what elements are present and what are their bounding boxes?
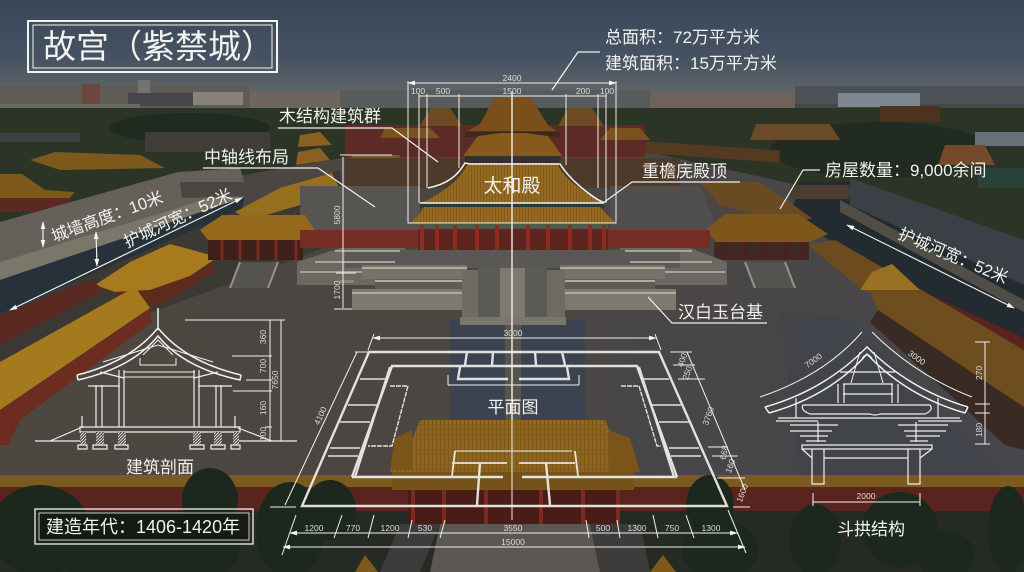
- marble terraces: [297, 248, 727, 325]
- label: double-eave roof: 重檐庑殿顶: [642, 162, 727, 181]
- plan dimension numbers: 160: [723, 457, 737, 474]
- plan walls: [302, 352, 727, 506]
- side hall buildings: [180, 182, 265, 198]
- floor plan drawing: [270, 328, 750, 555]
- plan dimensions: [270, 334, 750, 555]
- section dimensions: 160: [258, 401, 268, 415]
- rear halls: [345, 125, 645, 157]
- label: moat width left: [10, 181, 242, 310]
- vertical height dimension: 5800: [332, 205, 342, 224]
- plan dimension numbers: 500: [596, 523, 610, 533]
- hall dimension lines: 100: [600, 86, 614, 96]
- plan dimension numbers: 1300: [628, 523, 647, 533]
- right galleries: [700, 182, 812, 225]
- label: hall name: 太和殿: [483, 175, 541, 197]
- hall dimension lines: 200: [576, 86, 590, 96]
- construction years box: [35, 509, 253, 544]
- city wall and moat left: [0, 168, 245, 314]
- bracket dimensions: 3000: [906, 348, 928, 367]
- label: number of rooms: 房屋数量：9,000余间: [825, 156, 987, 181]
- green tree belt: [0, 108, 1024, 240]
- label: moat width left: 护城河宽：52米: [119, 181, 235, 253]
- area stats callout: 总面积：72万平方米: [605, 23, 760, 48]
- plan dimension numbers: 770: [346, 523, 360, 533]
- plan dimension numbers: 250: [680, 364, 694, 381]
- side plazas: [300, 186, 420, 236]
- section caption: 建筑剖面: [126, 458, 194, 477]
- front gate: [390, 420, 640, 472]
- plan dimension numbers: 1200: [381, 523, 400, 533]
- bracket dimensions: 7000: [803, 351, 824, 370]
- bracket dimensions: [760, 332, 990, 506]
- hall dimension lines: 2400: [503, 73, 522, 83]
- trees: [0, 468, 1024, 572]
- section dimensions: 360: [258, 330, 268, 344]
- plan dimension numbers: 750: [665, 523, 679, 533]
- vertical height dimension: 1700: [332, 280, 342, 299]
- right moat and wall: [790, 178, 1024, 345]
- label: moat width right: 护城河宽：52米: [895, 221, 1012, 288]
- bracket set drawing: [760, 332, 990, 539]
- section columns: [35, 370, 297, 441]
- bracket dimensions: 2000: [857, 491, 876, 501]
- label: central axis layout: [203, 148, 375, 207]
- hall forecourt steps: [230, 262, 795, 288]
- bracket roof: [765, 347, 968, 413]
- court shading: [450, 320, 585, 420]
- plan dimension numbers: 3000: [504, 328, 523, 338]
- hall dimension lines: 500: [436, 86, 450, 96]
- plan dimension numbers: 668: [718, 444, 730, 460]
- left galleries: [95, 244, 218, 292]
- title: [28, 21, 277, 72]
- plan dimension numbers: 4100: [312, 405, 329, 426]
- plan dimension numbers: [305, 328, 750, 547]
- side halls: [200, 215, 316, 240]
- plan dimension numbers: 15000: [501, 537, 525, 547]
- section dimensions: [185, 320, 285, 441]
- title: 故宫（紫禁城）: [43, 28, 274, 65]
- label: marble base: [648, 297, 767, 323]
- label: marble base: 汉白玉台基: [678, 303, 763, 322]
- section dimensions: 7650: [270, 370, 280, 389]
- area stats callout: [552, 23, 777, 90]
- plan dimension numbers: 400: [675, 351, 689, 368]
- label: number of rooms: [780, 156, 987, 209]
- section drawing: [35, 308, 297, 477]
- bracket caption: 斗拱结构: [837, 520, 905, 539]
- label: double-eave roof: [603, 162, 740, 203]
- plan dimension numbers: 1200: [305, 523, 324, 533]
- hall dimension lines: [408, 73, 616, 420]
- bracket dimensions: 180: [974, 423, 984, 437]
- bracket beams: [776, 372, 962, 484]
- label: wood structure: 木结构建筑群: [279, 107, 381, 126]
- section footings: [78, 432, 240, 449]
- plan dimension numbers: 3550: [504, 523, 523, 533]
- section dimensions: 100: [258, 427, 268, 441]
- plan dimension numbers: 1300: [702, 523, 721, 533]
- distant skyline: [0, 80, 1024, 116]
- plan dimension numbers: 3760: [700, 405, 716, 427]
- label: central axis layout: 中轴线布局: [204, 148, 289, 167]
- hall dimension lines: 100: [411, 86, 425, 96]
- label: city wall height: 城墙高度：10米: [48, 184, 166, 247]
- construction years box: 建造年代：1406-1420年: [46, 513, 240, 539]
- hall of supreme harmony: [410, 163, 616, 250]
- label: moat width right: [847, 221, 1014, 308]
- gate hall: [380, 472, 650, 572]
- hall dimension lines: 1500: [503, 86, 522, 96]
- plan dimension numbers: 530: [418, 523, 432, 533]
- section roof: [77, 308, 241, 380]
- section dimensions: 700: [258, 359, 268, 373]
- plan dimension numbers: 1600: [734, 482, 750, 504]
- label: wood structure: [278, 107, 438, 162]
- area stats callout: 建筑面积：15万平方米: [605, 49, 777, 74]
- south wall: [0, 475, 1024, 487]
- vertical height dimension: [332, 155, 392, 309]
- plan caption: 平面图: [488, 398, 538, 417]
- far roofs left: [30, 152, 165, 170]
- bracket dimensions: 270: [974, 366, 984, 380]
- red walls: [300, 230, 420, 248]
